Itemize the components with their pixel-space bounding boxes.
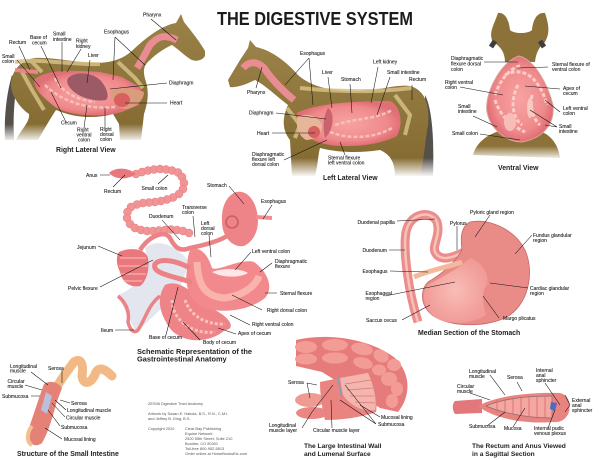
labels: Small colon (452, 131, 478, 137)
labels: region (366, 296, 380, 302)
publisher credits (148, 401, 247, 456)
labels: Longitudinal (269, 423, 296, 429)
publisher credits: and Jeffrey B. Ding, B.S. (148, 416, 191, 421)
labels: Serosa (288, 380, 304, 386)
labels: Circular (8, 379, 25, 385)
labels: muscle (469, 374, 485, 380)
rectum (109, 169, 136, 178)
stomach wall (422, 221, 530, 325)
labels: flexure dorsal (451, 62, 481, 68)
leader lines (470, 375, 570, 428)
labels: colon (78, 138, 90, 144)
labels: Ileum (101, 328, 113, 334)
publisher credits: Artwork by Susan E. Hakola, B.S., R.N., C.M.I. (148, 411, 228, 416)
liver (67, 73, 108, 101)
labels: colon (563, 111, 575, 117)
labels: Right ventral (445, 80, 473, 86)
labels: Small intestine (387, 70, 420, 76)
panel title: Structure of the Small Intestine (17, 451, 119, 458)
labels: Rectum (9, 40, 26, 46)
labels: Internal (536, 368, 553, 374)
labels: colon (451, 67, 463, 73)
abdominal organs (297, 101, 401, 146)
cut-away wall (320, 372, 377, 420)
panel title: Left Lateral View (323, 175, 378, 182)
labels: Base of cecum (149, 335, 182, 341)
labels: Heart (170, 100, 183, 106)
labels: Sternal flexure (328, 156, 360, 162)
leader lines (98, 175, 277, 340)
labels: Esophagus (261, 199, 287, 205)
labels: cecum (32, 40, 47, 46)
labels: Small (458, 104, 471, 110)
labels: Submucosa (61, 425, 88, 431)
publisher credits: Clear Bay Publishing (185, 426, 221, 431)
venous plexus (550, 402, 557, 411)
labels: Jejunum (77, 245, 96, 251)
title: THE DIGESTIVE SYSTEM (217, 9, 413, 29)
rectum (15, 70, 38, 72)
pharynx and esophagus (137, 37, 177, 68)
labels (2, 364, 111, 443)
labels: Sternal flexure of (552, 62, 590, 68)
lower left loops (295, 393, 325, 407)
lumen (340, 373, 376, 410)
right ventral and dorsal colon (186, 249, 269, 311)
labels: venous plexus (534, 431, 566, 437)
labels: Fundus glandular (533, 233, 572, 239)
labels: flexure (275, 264, 290, 270)
labels (247, 51, 426, 168)
publisher credits: Order online at HorseBooksEtc.com (185, 451, 247, 456)
panel title: The Rectum and Anus Viewed (472, 443, 566, 450)
labels: Left (201, 221, 210, 227)
labels: anal (536, 373, 545, 379)
labels (2, 12, 193, 144)
labels (445, 56, 590, 137)
labels (358, 210, 572, 324)
labels: Diaphragm (169, 80, 193, 86)
labels: colon (2, 59, 14, 65)
labels: Pylorus (450, 221, 467, 227)
labels: muscle (10, 368, 26, 374)
labels: flexure left (252, 157, 276, 163)
panel title: Schematic Representation of the (137, 347, 252, 356)
esophagus (256, 217, 272, 218)
labels: Mucosal lining (381, 415, 413, 421)
labels: intestine (559, 129, 578, 135)
pale esophageal region (424, 258, 488, 323)
labels: Mucosa (504, 426, 522, 432)
panel: right lateral view (0, 12, 205, 154)
colon backing (296, 337, 407, 412)
labels: Pyloric gland region (470, 210, 514, 216)
duodenum (405, 215, 464, 322)
panel: rectum and anus (453, 368, 593, 458)
labels: Serosa (48, 366, 64, 372)
heart (297, 115, 322, 140)
leader lines (385, 215, 532, 320)
labels: Small (53, 32, 66, 38)
labels: muscle (457, 389, 473, 395)
labels: Circular muscle layer (313, 428, 360, 434)
panel: large intestinal wall (269, 337, 413, 458)
labels: Small (559, 124, 572, 130)
labels: dorsal (201, 226, 215, 232)
labels: Pharynx (143, 12, 162, 18)
leader lines (17, 19, 176, 128)
colon haustra (295, 339, 403, 408)
mucosal folds (486, 396, 552, 418)
bottom fade (0, 124, 150, 142)
labels: sphincter (572, 408, 593, 414)
labels: Cardiac glandular (530, 286, 570, 292)
labels: Sternal flexure (280, 291, 312, 297)
labels: Esophageal (366, 291, 392, 297)
labels: Esophagus (104, 30, 130, 36)
labels: Rectum (409, 77, 426, 83)
labels: Right ventral colon (252, 322, 294, 328)
skeleton bones (287, 88, 412, 138)
labels: Longitudinal (469, 369, 496, 375)
panel: structure of the small intestine (2, 361, 119, 458)
rectum tube (453, 399, 482, 414)
labels (457, 368, 593, 437)
labels: Diaphragmatic (451, 56, 484, 62)
labels: Submucosa (2, 394, 29, 400)
labels: Heart (257, 131, 270, 137)
labels: Right dorsal colon (267, 308, 307, 314)
publisher credits: Equine Network (185, 431, 213, 436)
hind legs and torso (491, 13, 548, 62)
panel title: and Lumenal Surface (304, 451, 371, 458)
cut wall layers (26, 382, 62, 445)
labels: intestine (53, 37, 72, 43)
labels: left ventral colon (328, 160, 365, 166)
labels: Duodenum (362, 248, 387, 254)
labels: Right (76, 38, 88, 44)
labels: Serosa (507, 375, 523, 381)
labels (68, 173, 312, 346)
labels: region (530, 291, 544, 297)
labels: Diaphragmatic (252, 152, 285, 158)
labels: Duodenum (149, 214, 173, 220)
hock markers (491, 41, 544, 47)
labels: Body of cecum (203, 340, 236, 346)
panel title (304, 443, 382, 458)
labels: Small colon (142, 186, 168, 192)
left colon gap (212, 269, 248, 277)
panel title (472, 443, 566, 458)
labels: colon (201, 231, 213, 237)
panel title: Gastrointestinal Anatomy (137, 354, 228, 364)
labels: Submucosa (469, 424, 496, 430)
labels: Anus (86, 173, 98, 179)
labels: Diaphragm (249, 110, 273, 116)
labels: Left ventral (563, 106, 588, 112)
labels: Right (77, 128, 89, 134)
horse body (11, 14, 205, 140)
mesentery (118, 243, 190, 332)
cecum (160, 283, 231, 340)
labels: Submucosa (378, 422, 405, 428)
abdominal organs (34, 71, 141, 115)
publisher credits: ZES06 Digestive Tract Anatomy (148, 401, 203, 406)
labels: Pharynx (247, 90, 266, 96)
esophagus (414, 262, 462, 277)
publisher credits: Toll-free 800-952-5813 (185, 446, 224, 451)
labels: Left kidney (373, 60, 398, 66)
pharynx and esophagus (243, 63, 294, 100)
panel title (137, 347, 252, 364)
panel title: Ventral View (498, 165, 539, 172)
labels: Cecum (61, 120, 77, 126)
panel title: The Large Intestinal Wall (304, 443, 382, 450)
labels: Apex of cecum (238, 331, 271, 337)
labels: Internal pudic (534, 426, 565, 432)
duodenum tube (140, 232, 232, 250)
labels: Margo plicatus (503, 316, 536, 322)
liver edge (324, 108, 333, 138)
horse tail (420, 95, 433, 176)
leader lines (25, 370, 70, 439)
panel title: in a Sagittal Section (472, 451, 535, 458)
publisher credits: Boulder, CO 80301 (185, 441, 218, 446)
labels: colon (445, 85, 457, 91)
labels: Transverse (182, 205, 207, 211)
pelvic flexure (155, 261, 192, 282)
labels: muscle layer (269, 428, 297, 434)
labels: Saccus cecus (366, 318, 397, 324)
labels: dorsal (100, 132, 114, 138)
labels (269, 380, 413, 434)
panel: left lateral view (228, 40, 435, 182)
panel title: Right Lateral View (56, 147, 116, 154)
rectum outer wall (478, 393, 570, 422)
ileum (118, 296, 160, 332)
labels: Rectum (104, 189, 121, 195)
labels: sphincter (536, 378, 557, 384)
labels: Right (100, 127, 112, 133)
labels: muscle (8, 384, 24, 390)
small colon beaded tube (123, 165, 193, 237)
labels: colon (100, 137, 112, 143)
stomach (222, 192, 258, 246)
leader lines (460, 62, 560, 140)
labels: dorsal colon (252, 162, 279, 168)
cecum highlight (504, 113, 516, 131)
panel: schematic gastrointestinal anatomy (68, 165, 312, 364)
leader lines (256, 58, 412, 160)
publisher credits: Copyright 2010 (148, 426, 175, 431)
labels: region (533, 238, 547, 244)
labels: kidney (76, 44, 91, 50)
panel: median section of the stomach (358, 210, 572, 337)
labels: ventral (76, 132, 92, 138)
shoulders (473, 130, 560, 158)
labels: intestine (458, 109, 477, 115)
labels: anal (572, 403, 581, 409)
labels: Pelvic flexure (68, 286, 98, 292)
labels: Liver (88, 53, 99, 59)
labels: Stomach (341, 77, 361, 83)
jejunum (117, 249, 149, 286)
abdomen (487, 56, 553, 142)
labels: Stomach (207, 183, 227, 189)
labels: External (572, 398, 590, 404)
horse tail (5, 75, 17, 140)
publisher credits: 2520 55th Street, Suite 210 (185, 436, 233, 441)
labels: Small (2, 54, 15, 60)
skeleton bones (15, 60, 143, 110)
panel title: Median Section of the Stomach (418, 330, 520, 337)
labels: Esophagus (362, 269, 388, 275)
labels: ventral colon (552, 67, 581, 73)
heart (110, 88, 144, 109)
labels: Esophagus (300, 51, 326, 57)
labels: Circular muscle (66, 416, 101, 422)
labels: Circular (457, 384, 475, 390)
labels: cecum (563, 91, 578, 97)
colon haustra (495, 66, 547, 132)
labels: Left ventral colon (252, 249, 290, 255)
labels: Base of (30, 35, 48, 41)
labels: Mucosal lining (64, 437, 96, 443)
labels: Diaphragmatic (275, 259, 308, 265)
intestine tube (56, 361, 112, 388)
labels: Longitudinal (10, 364, 37, 370)
leader lines (302, 383, 380, 428)
labels: Liver (322, 70, 333, 76)
labels: Longitudinal muscle (67, 408, 111, 414)
bottom fade (285, 158, 435, 177)
horse body (228, 40, 428, 176)
panel: ventral view (445, 13, 590, 172)
labels: Apex of (563, 86, 581, 92)
labels: colon (182, 210, 194, 216)
labels: Serosa (71, 401, 87, 407)
labels: Duodenal papilla (358, 220, 395, 226)
